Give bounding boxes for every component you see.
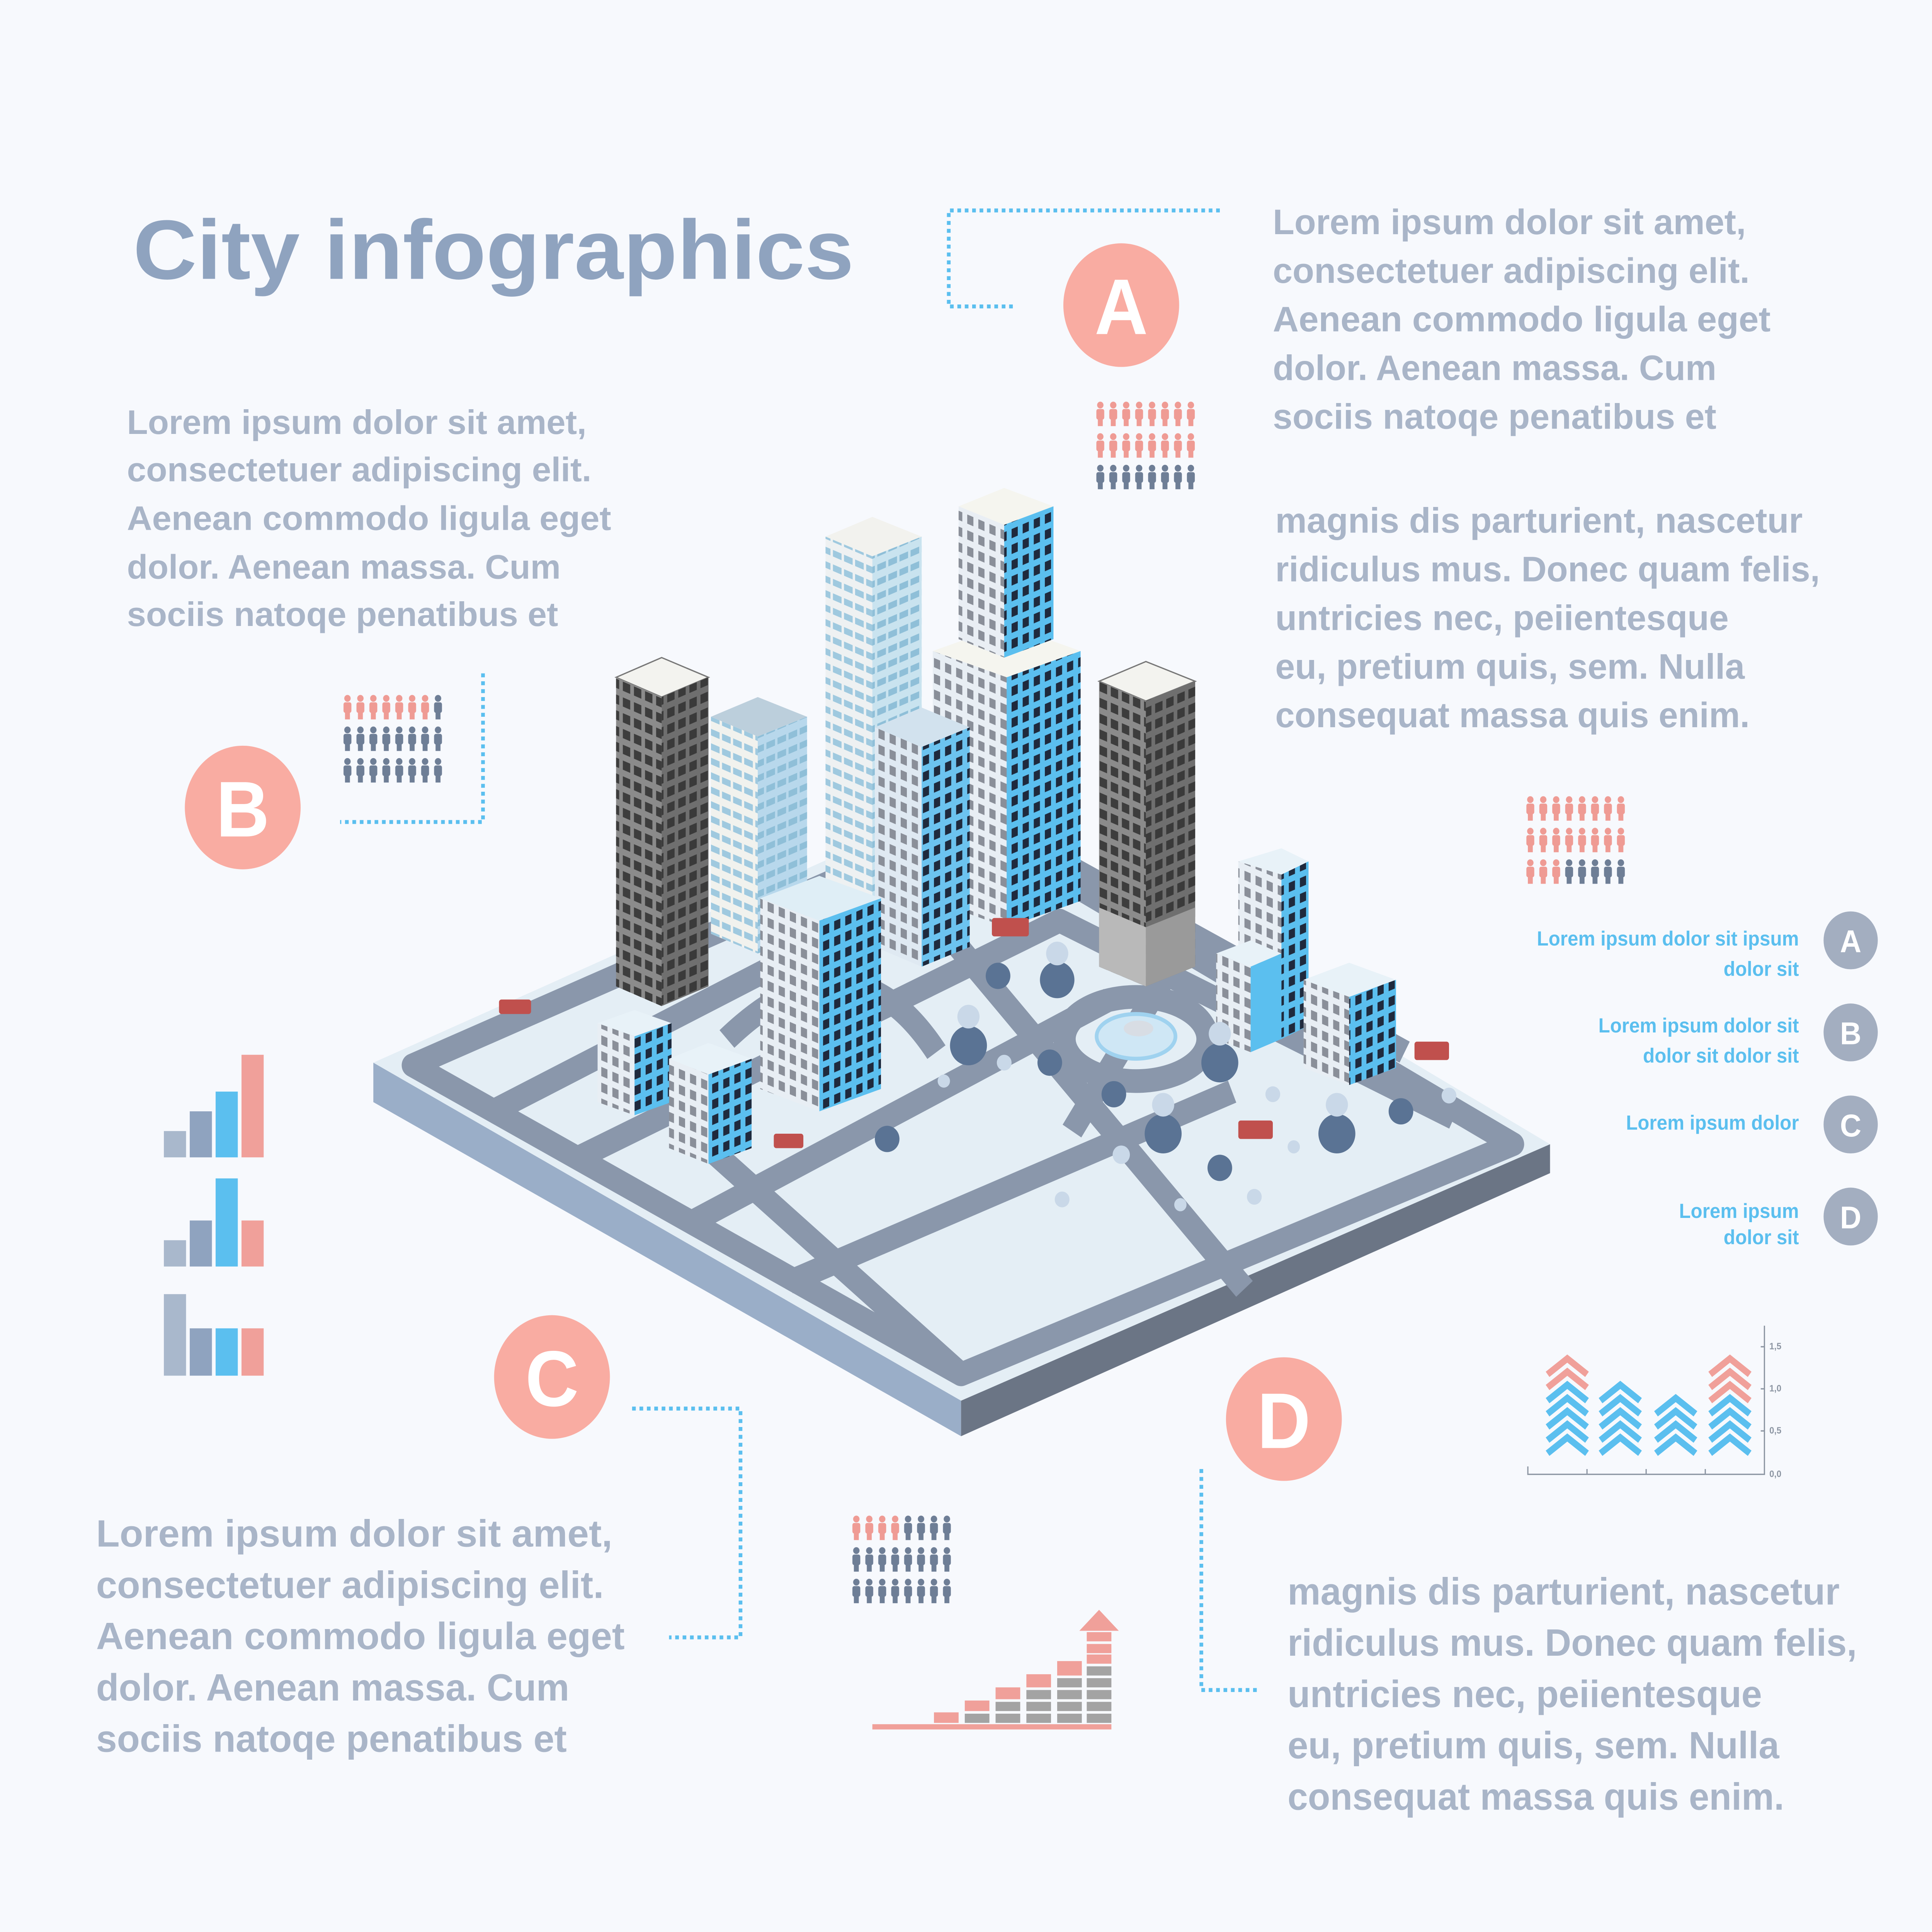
text block: right continuation: consequat massa quis enim. — [1275, 695, 1750, 735]
legend: A — [1840, 923, 1861, 959]
people icons right — [1524, 796, 1628, 885]
building 7 — [760, 876, 881, 1111]
step bar chart — [872, 1610, 1119, 1730]
legend: B — [1840, 1015, 1861, 1051]
building 4 — [933, 488, 1081, 927]
legend: C — [1840, 1107, 1861, 1143]
text block: C: consectetuer adipiscing elit. — [96, 1564, 604, 1606]
slab top — [373, 797, 1550, 1401]
badge A — [1063, 243, 1179, 367]
legend — [1537, 912, 1878, 1248]
bar chart 1 — [164, 1055, 264, 1157]
building 1 — [616, 658, 709, 1006]
text block: right continuation: magnis dis parturient, nascetur — [1275, 500, 1803, 540]
legend: Lorem ipsum dolor — [1626, 1111, 1799, 1134]
trees — [875, 942, 1413, 1181]
badge D: D — [1257, 1377, 1311, 1465]
badge C — [494, 1315, 610, 1439]
text block: right continuation: ridiculus mus. Donec quam felis, — [1275, 549, 1820, 589]
text block: top right A: Aenean commodo ligula eget — [1273, 299, 1770, 339]
dotted connector lines — [340, 211, 1257, 1690]
text block: B: sociis natoqe penatibus et — [127, 595, 558, 634]
roads — [413, 822, 1513, 1374]
text block: right continuation: eu, pretium quis, sem. Nulla — [1275, 646, 1745, 686]
text block: top right A: consectetuer adipiscing elit. — [1273, 250, 1750, 290]
text block: top right A: Lorem ipsum dolor sit amet, — [1273, 202, 1746, 242]
text block: top right A: sociis natoqe penatibus et — [1273, 396, 1716, 436]
text block: C: Lorem ipsum dolor sit amet, — [96, 1512, 612, 1555]
building 8 — [598, 1010, 752, 1164]
chevron chart: 1,5 — [1769, 1341, 1781, 1351]
legend: D — [1840, 1200, 1861, 1235]
title: City infographics — [133, 202, 854, 297]
text block: B: consectetuer adipiscing elit. — [127, 451, 592, 489]
text block: D: magnis dis parturient, nascetur — [1287, 1570, 1840, 1613]
text block: D: untricies nec, peiientesque — [1287, 1673, 1762, 1716]
building 5 — [875, 707, 970, 967]
chevron chart: 0,0 — [1769, 1469, 1781, 1479]
legend: Lorem ipsum dolor sit ipsum — [1537, 927, 1799, 950]
badge C: C — [525, 1335, 579, 1423]
text block: B: dolor. Aenean massa. Cum — [127, 548, 561, 586]
legend: dolor sit — [1724, 1226, 1799, 1248]
isometric city — [373, 488, 1550, 1436]
people icons C — [850, 1515, 954, 1604]
building 2 — [711, 697, 807, 954]
building 6 — [1099, 662, 1195, 986]
badge A: A — [1095, 263, 1148, 351]
chevron chart: 1,0 — [1769, 1383, 1781, 1393]
legend: dolor sit dolor sit — [1643, 1044, 1799, 1067]
text block: right continuation: untricies nec, peiientesque — [1275, 598, 1729, 638]
text block: D: ridiculus mus. Donec quam felis, — [1287, 1621, 1857, 1664]
text block: C — [96, 1512, 625, 1760]
text block: B — [127, 403, 611, 634]
people icons B — [341, 694, 445, 784]
text block: right continuation — [1275, 500, 1820, 735]
legend: Lorem ipsum — [1679, 1199, 1799, 1222]
people icons A — [1094, 401, 1197, 491]
text block: B: Lorem ipsum dolor sit amet, — [127, 403, 587, 442]
badge B — [185, 746, 301, 869]
text block: D — [1287, 1570, 1857, 1818]
text block: top right A: dolor. Aenean massa. Cum — [1273, 348, 1716, 388]
building 3 — [825, 517, 922, 908]
bar chart 3 — [164, 1294, 264, 1376]
bar chart 2 — [164, 1179, 264, 1267]
text block: D: eu, pretium quis, sem. Nulla — [1287, 1724, 1779, 1767]
text block: B: Aenean commodo ligula eget — [127, 499, 611, 537]
text block: D: consequat massa quis enim. — [1287, 1776, 1784, 1818]
badge D — [1226, 1357, 1342, 1481]
legend: dolor sit — [1724, 957, 1799, 980]
text block: C: Aenean commodo ligula eget — [96, 1615, 625, 1658]
chevron chart: 0,5 — [1769, 1425, 1781, 1435]
legend: Lorem ipsum dolor sit — [1599, 1014, 1799, 1037]
slab sides — [373, 1063, 961, 1436]
badge B: B — [216, 765, 269, 853]
text block: top right A — [1273, 202, 1770, 436]
chevron chart — [1528, 1326, 1781, 1479]
cars — [499, 918, 1449, 1148]
fountain — [1097, 1014, 1175, 1059]
text block: C: sociis natoqe penatibus et — [96, 1718, 567, 1760]
text block: C: dolor. Aenean massa. Cum — [96, 1666, 569, 1709]
building 9 — [1216, 848, 1396, 1085]
